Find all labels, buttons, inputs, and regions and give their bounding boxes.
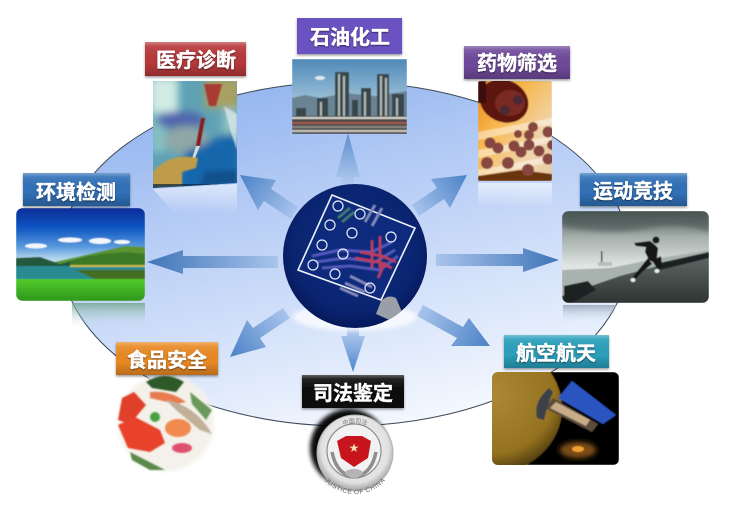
label: 药物筛选: 药物筛选 <box>477 51 557 75</box>
label: 环境检测: 环境检测 <box>36 180 116 204</box>
label: 石油化工: 石油化工 <box>310 26 390 49</box>
field: medical diagnosis <box>145 42 246 214</box>
reflection <box>563 305 617 322</box>
reflection <box>72 303 145 327</box>
label: 药物筛选 <box>464 46 570 79</box>
reflection <box>153 184 237 214</box>
label: 运动竞技: 运动竞技 <box>593 180 673 203</box>
label: 食品安全: 食品安全 <box>127 348 207 372</box>
photo: lake landscape <box>16 208 145 301</box>
field: petrochemical <box>292 18 407 134</box>
label: 司法鉴定: 司法鉴定 <box>313 381 393 405</box>
label: 运动竞技 <box>580 173 687 206</box>
arrow: up to petrochemical <box>336 133 360 186</box>
field: aerospace <box>492 335 619 465</box>
arrow: upper right to drug screening <box>412 175 467 216</box>
photo: refinery <box>292 59 407 134</box>
photo: space telescope and planet <box>492 372 619 465</box>
field: sports <box>562 173 709 322</box>
photo: seafood plate <box>118 375 214 471</box>
photo: sprinter <box>562 211 709 303</box>
arrow: left to environmental monitoring <box>147 250 278 274</box>
field: environmental monitoring <box>16 173 145 327</box>
label: 医疗诊断: 医疗诊断 <box>156 49 236 72</box>
field: forensics <box>300 375 406 494</box>
icon: justice badge <box>306 408 394 494</box>
central microfluidic chip image <box>283 184 427 331</box>
arrow: right to sports <box>436 248 559 272</box>
reflection <box>478 183 552 207</box>
label: 航空航天: 航空航天 <box>516 342 596 365</box>
arrow: lower right to aerospace <box>417 305 490 346</box>
label: 医疗诊断 <box>145 42 246 76</box>
arrow: lower left to food safety <box>230 308 290 357</box>
arrow: upper left to medical diagnosis <box>240 175 298 219</box>
arrow: down to forensics <box>341 328 365 372</box>
arrows from centre to the eight fields <box>147 133 559 372</box>
field: food safety <box>116 342 218 471</box>
photo: pills <box>478 81 552 181</box>
icon: justice badge: JUSTICE OF CHINA <box>325 478 386 494</box>
background ellipse <box>61 82 629 426</box>
icon: justice badge: ★ <box>349 441 359 455</box>
photo: blood syringe <box>153 81 237 188</box>
icon: justice badge: 中国司法 <box>342 418 368 426</box>
label: 航空航天 <box>504 335 609 368</box>
field: drug screening <box>464 46 570 207</box>
label: 环境检测 <box>23 173 130 206</box>
